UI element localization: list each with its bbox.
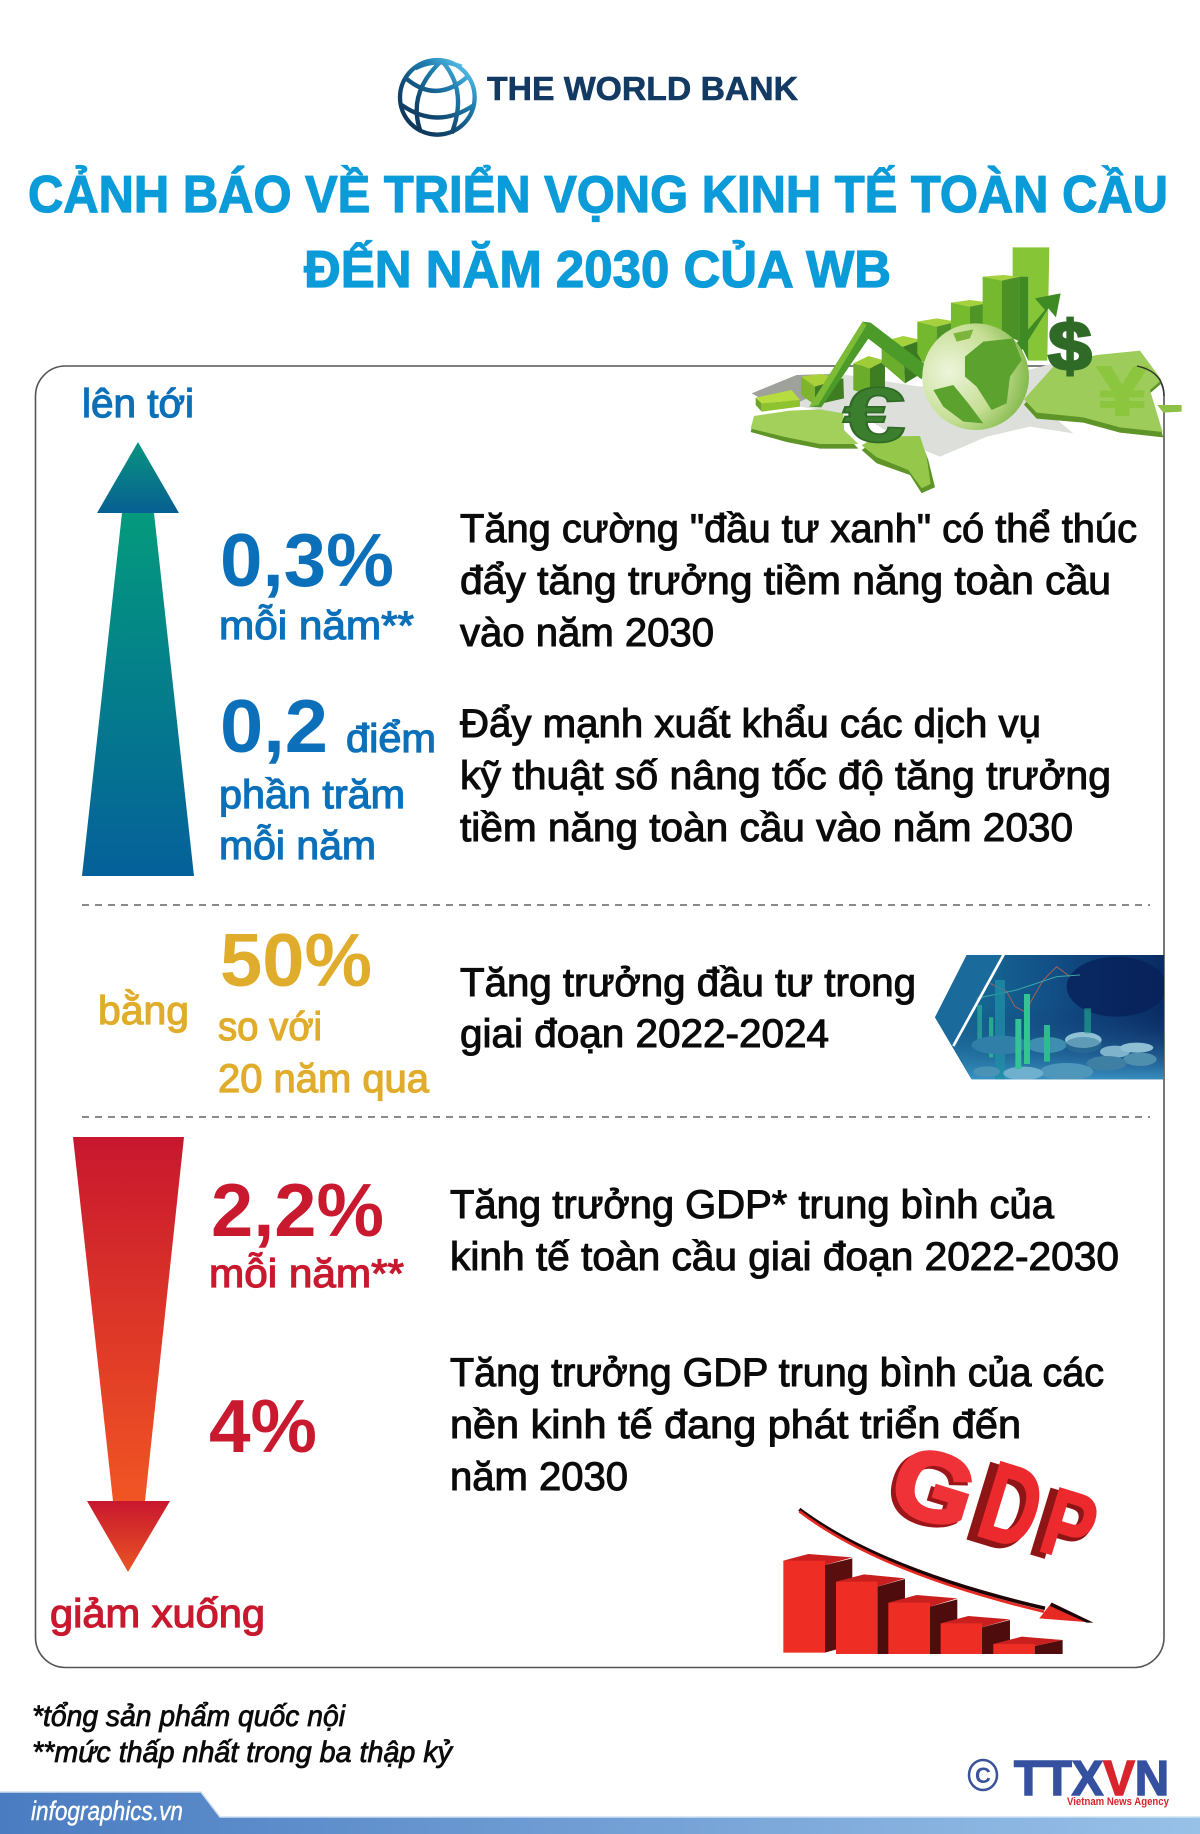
GDP 3D lettering: G: [876, 1428, 983, 1553]
illustration: falling GDP bars: [783, 1425, 1109, 1654]
stat: 2,2%: [209, 1168, 404, 1296]
image: investment chart and coins: [933, 953, 1167, 1082]
arrow: downward gradient: [73, 1137, 184, 1572]
text: digital services exports: kỹ thuật số nâng tốc độ tăng trưởng: [460, 754, 1111, 798]
text: green investment: đẩy tăng trưởng tiềm năng toàn cầu: [460, 559, 1111, 603]
GDP 3D lettering: [876, 1425, 1109, 1588]
map: Americas: [751, 409, 935, 493]
bars: [783, 1554, 1063, 1654]
text: green investment: [460, 507, 1137, 655]
arrow: upward gradient: [82, 442, 194, 876]
stat: 50%: [218, 918, 430, 1101]
footnotes: [32, 1700, 454, 1769]
stat: 0,2 điểm phần trăm: [219, 684, 436, 868]
illustration: green world economy: [751, 247, 1182, 493]
copyright mark: [969, 1760, 997, 1790]
GDP 3D lettering: P: [1020, 1469, 1106, 1588]
arrow: [809, 293, 1061, 407]
trend arrow: [799, 1509, 1093, 1623]
stat: 50%: 50%: [220, 918, 372, 1002]
text: digital services exports: [460, 702, 1111, 850]
logo: The World Bank: [400, 60, 798, 135]
label: bằng: bằng: [98, 988, 189, 1033]
stat: 50%: so với: [218, 1005, 322, 1049]
text: developing economies GDP: Tăng trưởng GDP trung bình của các: [450, 1351, 1104, 1395]
GDP 3D lettering: D: [955, 1439, 1053, 1579]
stat: 0,3%: [219, 518, 414, 648]
footer band: [0, 1792, 1200, 1834]
stat: 2,2%: 2,2%: [211, 1168, 384, 1252]
GDP 3D lettering: D: [966, 1437, 1057, 1574]
footnotes: **mức thấp nhất trong ba thập kỷ: [32, 1736, 454, 1769]
agency wordmark: TTXVN: [1014, 1752, 1169, 1806]
GDP 3D lettering: P: [1030, 1468, 1109, 1584]
text: digital services exports: Đẩy mạnh xuất khẩu các dịch vụ: [460, 702, 1041, 746]
text: digital services exports: tiềm năng toàn cầu vào năm 2030: [460, 806, 1073, 850]
GDP 3D lettering: G: [880, 1425, 988, 1551]
label: lên tới: lên tới: [82, 382, 194, 426]
stat: 4%: 4%: [209, 1384, 317, 1468]
footer link text: infographics.vn: [31, 1796, 183, 1826]
agency tagline: Vietnam News Agency: [1067, 1796, 1170, 1808]
text: investment growth: giai đoạn 2022-2024: [460, 1012, 829, 1056]
text: investment growth: Tăng trưởng đầu tư trong: [460, 961, 916, 1005]
icon: dollar sign: $: [1048, 307, 1092, 385]
title: [28, 165, 1168, 299]
logo: TTXVN: [969, 1752, 1170, 1808]
icon: World Bank globe: [400, 60, 475, 135]
text: investment growth: [460, 961, 916, 1056]
text: global GDP growth: [450, 1183, 1119, 1279]
bars: [756, 247, 1049, 412]
stat: 0,3%: 0,3%: [220, 518, 394, 602]
stat: 0,3%: mỗi năm**: [219, 603, 414, 648]
stat: 0,2 điểm phần trăm: mỗi năm: [219, 823, 376, 868]
icon: euro sign: €: [843, 371, 906, 459]
text: green investment: Tăng cường "đầu tư xanh" có thể thúc: [460, 507, 1137, 551]
stat: 0,2 điểm phần trăm: phần trăm: [219, 773, 405, 817]
panel: main frame: [36, 366, 1164, 1668]
text: global GDP growth: Tăng trưởng GDP* trung bình của: [450, 1183, 1055, 1227]
logo wordmark: THE WORLD BANK: [487, 70, 798, 107]
footnotes: *tổng sản phẩm quốc nội: [32, 1700, 346, 1733]
label: giảm xuống: giảm xuống: [50, 1592, 265, 1636]
text: developing economies GDP: năm 2030: [450, 1455, 628, 1499]
text: green investment: vào năm 2030: [460, 611, 714, 655]
title: ĐẾN NĂM 2030 CỦA WB: [304, 240, 891, 299]
text: developing economies GDP: [450, 1351, 1104, 1499]
stat: 50%: 20 năm qua: [218, 1057, 430, 1101]
copyright mark: C: [975, 1763, 991, 1788]
text: global GDP growth: kinh tế toàn cầu giai đoạn 2022-2030: [450, 1235, 1119, 1279]
text: developing economies GDP: nền kinh tế đang phát triển đến: [450, 1403, 1021, 1447]
globe: [922, 323, 1029, 430]
map: Europe, Africa and Asia: [1024, 351, 1182, 437]
icon: yen sign: ¥: [1097, 352, 1147, 430]
stat: 0,2 điểm phần trăm: điểm: [346, 717, 436, 761]
stat: 2,2%: mỗi năm**: [209, 1251, 404, 1296]
stat: 0,2 điểm phần trăm: 0,2: [220, 684, 328, 768]
